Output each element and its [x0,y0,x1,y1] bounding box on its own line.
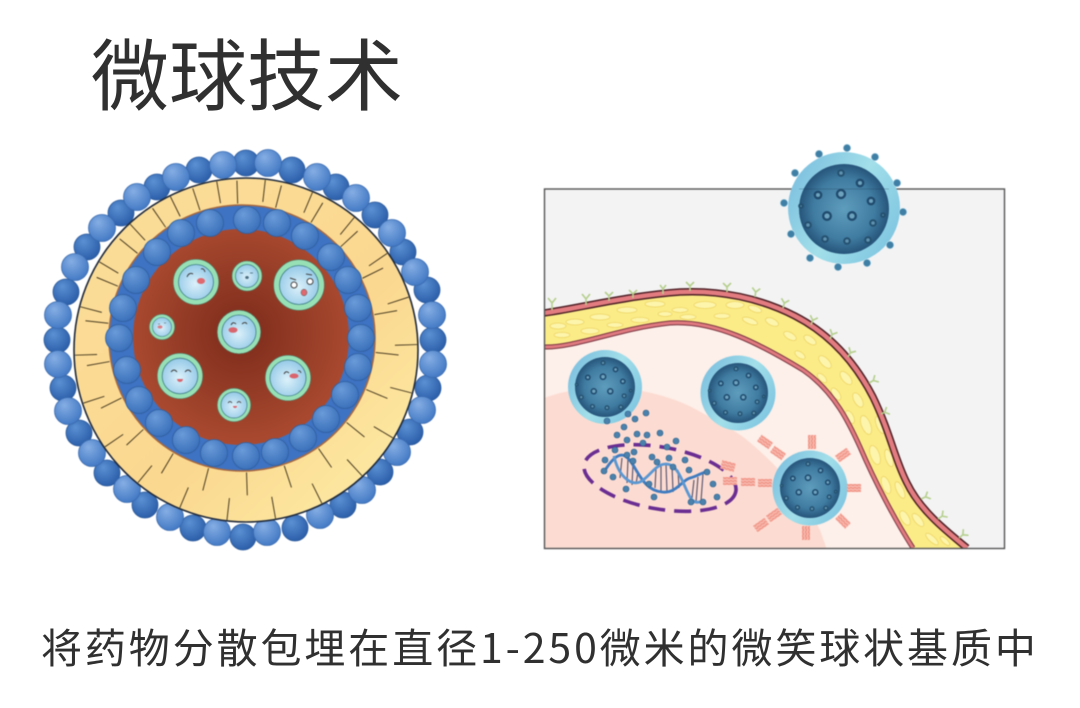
inner blue layer [109,205,375,471]
pale pink interior [544,323,913,560]
receptors [548,282,968,541]
cell: bottom [217,388,251,422]
title: 微球技术 [91,15,403,127]
cell: lower left [157,353,203,399]
tissue layers [544,292,967,560]
red signal marks [720,435,861,540]
microsphere releasing drug [568,350,642,424]
brown drug core [133,229,349,445]
smiling drug cells [149,259,324,422]
upper membrane line [544,292,967,548]
caption: 将药物分散包埋在直径1-250微米的微笑球状基质中 [41,615,1039,675]
panel: tissue scene [544,144,1004,560]
released drug particles [601,410,720,505]
yellow membrane band [544,292,967,560]
DNA target ellipse [579,434,741,522]
DNA helix [604,455,707,502]
microsphere middle [700,356,776,430]
yellow lipid ring [74,178,418,522]
cell: left small [149,314,175,340]
microsphere cross-section diagram [44,150,446,550]
darker pink region [544,388,827,550]
inner bead layer [106,206,374,470]
cell: top left [173,259,219,305]
panel border [544,189,1004,548]
panel background [544,189,1004,548]
outer bead layer [44,150,446,550]
cell: centre [217,310,261,354]
cell: top small [232,261,262,291]
lower membrane line [544,323,913,548]
microsphere emitting signals [772,450,848,526]
cell: lower right [265,355,311,401]
membrane cells [550,301,951,547]
large microsphere with surface beads [780,144,907,271]
cell: surprised face [274,260,324,310]
